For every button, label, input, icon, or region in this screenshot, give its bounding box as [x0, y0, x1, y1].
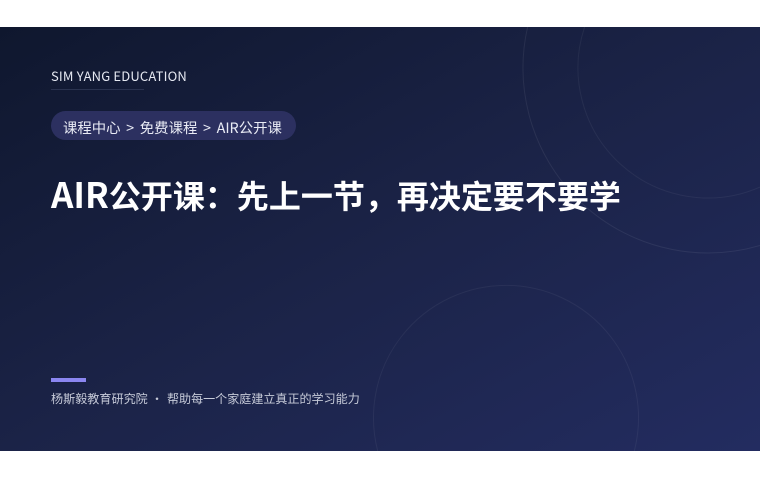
brand label: SIM YANG EDUCATION [51, 66, 187, 85]
footer: tagline: 帮助每一个家庭建立真正的学习能力 [167, 390, 360, 407]
title: AIR公开课：先上一节，再决定要不要学 [51, 168, 621, 219]
footer: separator dot: · [151, 390, 163, 407]
accent bar [51, 378, 86, 382]
breadcrumb text: 课程中心 > 免费课程 > AIR公开课 [63, 117, 282, 138]
brand underline [51, 89, 144, 90]
footer: institute name: 杨斯毅教育研究院 [51, 390, 148, 407]
breadcrumb pill [51, 111, 296, 140]
